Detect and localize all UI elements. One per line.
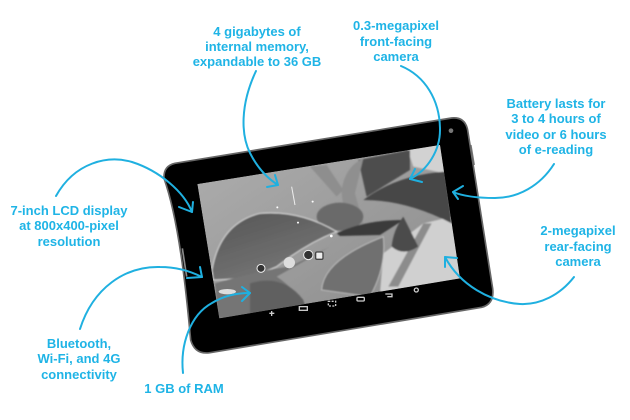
label: display: at 800x400-pixel [19, 218, 119, 233]
arrow: connectivity [80, 267, 202, 329]
small white dots [292, 187, 295, 205]
label: memory: expandable to 36 GB [193, 54, 321, 69]
label: connectivity: connectivity [41, 367, 118, 382]
lower centre leaf [322, 237, 384, 297]
label: connectivity: Wi-Fi, and 4G [38, 351, 120, 366]
label: memory: internal memory, [205, 39, 309, 54]
label: display: resolution [38, 234, 100, 249]
top dim branch [310, 165, 343, 197]
stem leaf [342, 158, 364, 224]
dark upper leaf [358, 150, 410, 197]
label: front camera: front-facing [360, 34, 432, 49]
label: battery: Battery lasts for [507, 96, 605, 111]
right dark leaf [363, 172, 452, 223]
label: rear camera: camera [555, 254, 602, 269]
label: rear camera: rear-facing [544, 239, 612, 254]
centre bud [317, 203, 363, 231]
arrow: RAM [182, 287, 250, 373]
arrow: 7-inch display [56, 160, 193, 212]
label: front camera: camera [373, 49, 420, 64]
arrow: battery [453, 164, 554, 199]
label: memory: 4 gigabytes of [213, 24, 301, 39]
screen [197, 143, 462, 318]
side buttons [471, 145, 474, 165]
lower stem dark [337, 220, 403, 236]
label: RAM: 1 GB of RAM [144, 381, 224, 396]
label: front camera: 0.3-megapixel [353, 18, 439, 33]
tablet body [164, 118, 493, 353]
navigation icons [269, 288, 418, 316]
camera lens [449, 128, 453, 133]
bottom right light area [380, 217, 462, 293]
tablet [164, 118, 493, 353]
label: rear camera: 2-megapixel [540, 223, 616, 238]
top right light area [407, 143, 445, 173]
diagonal pale stem [388, 223, 432, 287]
label: battery: video or 6 hours [505, 127, 607, 142]
bottom left dark band [214, 250, 322, 318]
arrow: rear camera [445, 257, 574, 304]
hanging dark bud [392, 217, 418, 252]
main dark leaf [212, 213, 337, 280]
arrow: front camera [401, 66, 440, 182]
label: battery: of e-reading [519, 142, 593, 157]
arrow: memory [244, 71, 278, 187]
volume key [182, 248, 187, 277]
label: battery: 3 to 4 hours of [511, 111, 601, 126]
label: display: 7-inch LCD display [10, 203, 128, 218]
label: connectivity: Bluetooth, [47, 336, 111, 351]
app icons [257, 264, 265, 272]
